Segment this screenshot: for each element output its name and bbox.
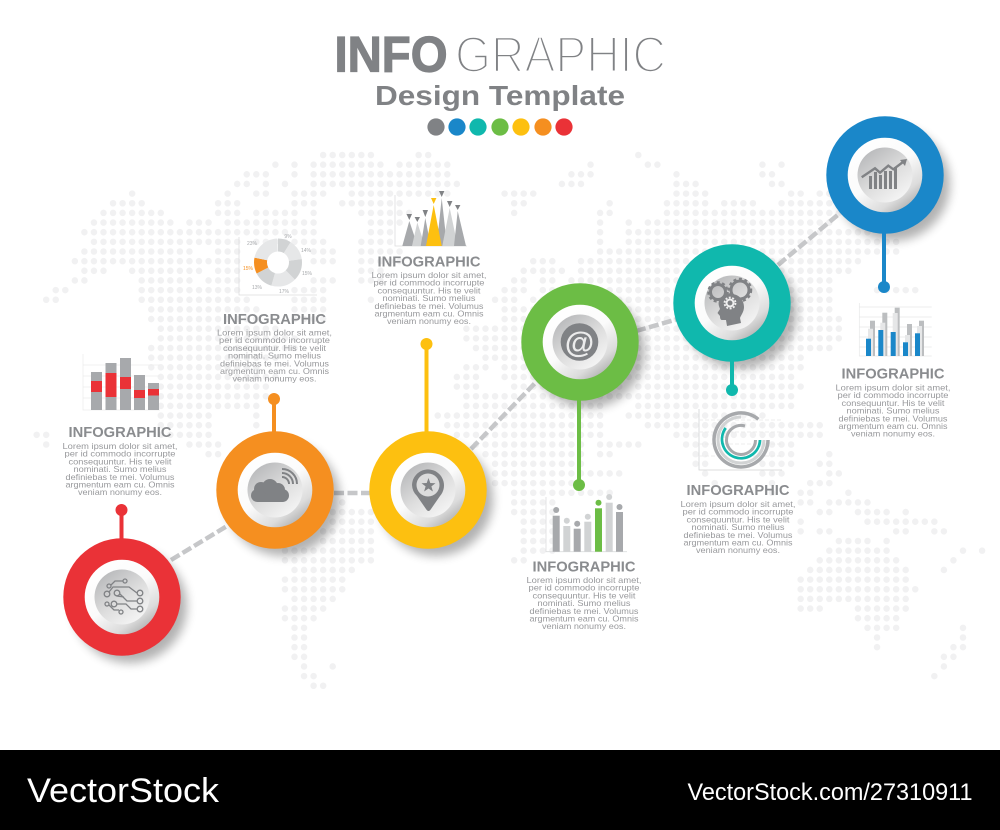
text block: yellow: INFOGRAPHIC xyxy=(378,254,481,270)
subtitle: Design Template xyxy=(375,80,625,111)
text block: orange: Lorem ipsum dolor sit amet, xyxy=(217,328,332,338)
icon: at sign xyxy=(561,323,598,361)
text block: green: veniam nonumy eos. xyxy=(542,621,626,631)
text block: red xyxy=(62,424,178,497)
text block: blue: consequuntur. His te velit xyxy=(842,398,945,408)
icon: map pin with star xyxy=(412,469,444,511)
text block: blue: INFOGRAPHIC xyxy=(842,366,945,382)
text block: red: definiebas te mei. Volumus xyxy=(66,472,174,482)
text block: yellow: definiebas te mei. Volumus xyxy=(374,301,484,311)
node 1: red xyxy=(63,504,187,663)
text block: orange: nominati. Sumo melius xyxy=(228,351,321,361)
text block: teal: per id commodo incorrupte xyxy=(682,507,794,517)
text block: orange: INFOGRAPHIC xyxy=(223,311,326,328)
text block: blue: argmentum eam cu. Omnis xyxy=(838,421,948,431)
text block: teal: veniam nonumy eos. xyxy=(696,545,780,555)
chart: donut, orange: 14% xyxy=(301,248,312,254)
icon: cloud with signal xyxy=(251,469,297,502)
text block: yellow: veniam nonumy eos. xyxy=(387,316,471,326)
chart: donut, orange: 23% xyxy=(247,241,258,247)
text block: green: definiebas te mei. Volumus xyxy=(530,606,638,616)
footer bar: VectorStock xyxy=(27,772,220,810)
text block: teal: definiebas te mei. Volumus xyxy=(684,530,792,540)
text block: blue: veniam nonumy eos. xyxy=(851,429,935,439)
text block: teal: nominati. Sumo melius xyxy=(692,522,784,532)
text block: yellow: Lorem ipsum dolor sit amet, xyxy=(372,270,486,280)
text block: orange: veniam nonumy eos. xyxy=(232,374,316,384)
icon: at sign: @ xyxy=(565,326,594,360)
text block: yellow: per id commodo incorrupte xyxy=(374,278,485,288)
footer bar: VectorStock.com/27310911 xyxy=(688,779,972,806)
dashed connectors xyxy=(171,208,846,560)
text block: green xyxy=(526,558,642,631)
text block: orange: consequuntur. His te velit xyxy=(223,343,327,353)
chart: stacked bars, red xyxy=(83,354,160,410)
node 6: blue xyxy=(826,116,950,293)
text block: teal: consequuntur. His te velit xyxy=(686,514,790,524)
text block: red: argmentum eam cu. Omnis xyxy=(66,480,174,490)
chart: donut, orange: 13% xyxy=(252,285,263,291)
text block: orange: definiebas te mei. Volumus xyxy=(220,358,329,368)
text block: red: nominati. Sumo melius xyxy=(74,464,166,474)
footer bar xyxy=(0,750,1000,830)
chart: lollipop bars, green xyxy=(546,494,627,552)
text block: red: INFOGRAPHIC xyxy=(68,424,172,441)
chart: donut, orange xyxy=(239,234,317,295)
text block: yellow: consequuntur. His te velit xyxy=(378,285,481,295)
text block: teal xyxy=(680,482,796,555)
title: GRAPHIC xyxy=(455,26,666,83)
node 5: teal xyxy=(673,244,797,396)
title: INFO xyxy=(334,26,448,82)
text block: red: consequuntur. His te velit xyxy=(68,456,172,466)
colour dots xyxy=(427,118,573,136)
text block: green: Lorem ipsum dolor sit amet, xyxy=(526,575,642,585)
text block: teal: Lorem ipsum dolor sit amet, xyxy=(680,499,796,509)
text block: orange: argmentum eam cu. Omnis xyxy=(220,366,329,376)
text block: green: consequuntur. His te velit xyxy=(532,590,636,600)
chart: mountain peaks, yellow xyxy=(395,191,467,246)
text block: blue: per id commodo incorrupte xyxy=(838,390,949,400)
chart: donut, orange: 15% xyxy=(302,271,313,277)
text block: blue: nominati. Sumo melius xyxy=(846,406,940,416)
text block: red: per id commodo incorrupte xyxy=(64,449,176,459)
text block: red: veniam nonumy eos. xyxy=(78,487,162,497)
chart: donut, orange: 17% xyxy=(279,289,290,295)
text block: orange: per id commodo incorrupte xyxy=(219,335,330,345)
text block: teal: INFOGRAPHIC xyxy=(686,482,790,499)
text block: blue: definiebas te mei. Volumus xyxy=(838,413,948,423)
chart: donut, orange: 9% xyxy=(284,234,292,240)
text block: blue xyxy=(836,366,950,439)
text block: green: nominati. Sumo melius xyxy=(538,598,630,608)
icon: growth chart xyxy=(862,159,907,189)
text block: green: argmentum eam cu. Omnis xyxy=(530,614,638,624)
text block: orange xyxy=(217,311,332,384)
node 4: green xyxy=(521,283,645,491)
title xyxy=(334,26,666,83)
text block: red: Lorem ipsum dolor sit amet, xyxy=(62,441,178,451)
chart: donut, orange: 15% xyxy=(243,266,254,272)
text block: yellow: nominati. Sumo melius xyxy=(382,293,476,303)
text block: yellow: argmentum eam cu. Omnis xyxy=(374,308,484,318)
text block: green: INFOGRAPHIC xyxy=(532,558,636,576)
icon: head with gears xyxy=(708,279,751,326)
node 2: orange xyxy=(216,393,340,556)
text block: green: per id commodo incorrupte xyxy=(528,583,640,593)
text block: yellow xyxy=(372,254,486,326)
chart: grouped bars, blue xyxy=(859,303,932,356)
text block: blue: Lorem ipsum dolor sit amet, xyxy=(836,382,950,392)
chart: concentric rings, teal xyxy=(699,409,782,470)
text block: teal: argmentum eam cu. Omnis xyxy=(684,538,792,548)
dotted world map xyxy=(37,155,982,686)
node 3: yellow xyxy=(369,338,493,556)
icon: circuit xyxy=(104,579,143,614)
